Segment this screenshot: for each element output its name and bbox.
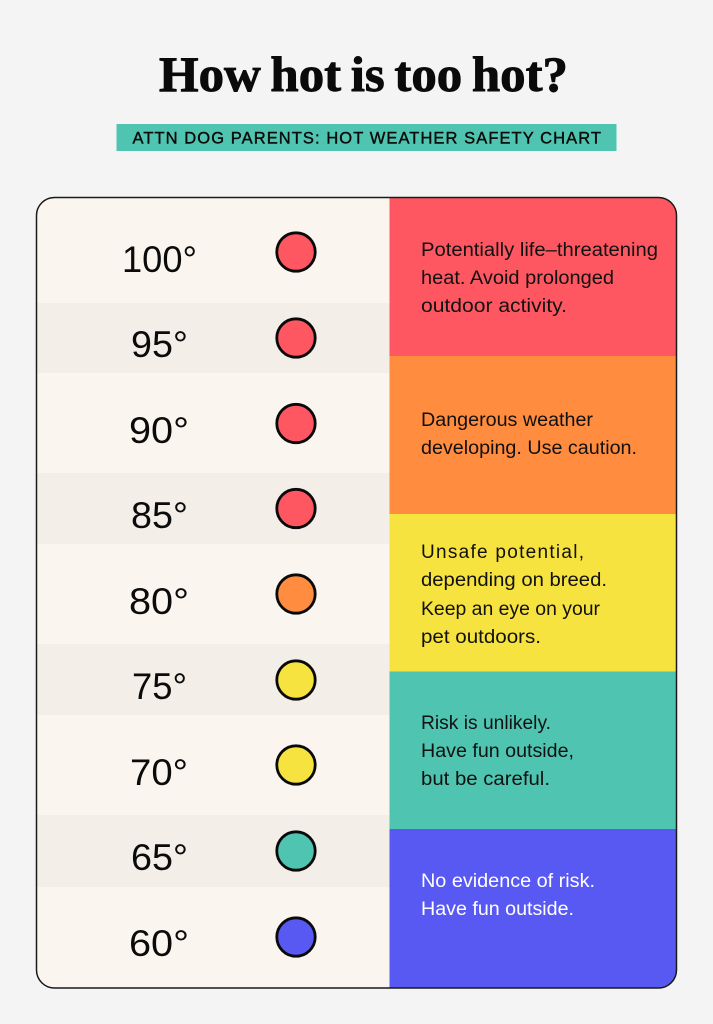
panel: safety chart bbox=[36, 197, 678, 989]
risk text: no evidence: No evidence of risk. bbox=[421, 871, 595, 892]
temperature row: 70: 70° bbox=[130, 751, 188, 793]
temperature row: 85 bbox=[131, 489, 315, 536]
temperature row: 100: 100° bbox=[122, 238, 197, 280]
temperature row: 65: 65° bbox=[131, 836, 188, 878]
risk text: unlikely: Risk is unlikely. bbox=[421, 713, 551, 734]
temperature row: 65 bbox=[131, 832, 315, 878]
risk text: dangerous: Dangerous weather bbox=[421, 410, 594, 431]
risk text: dangerous bbox=[421, 410, 637, 459]
temperature row: 80: 80° bbox=[129, 580, 189, 622]
temperature row: 95 bbox=[131, 319, 315, 365]
temperature row: 75: 75° bbox=[132, 665, 187, 707]
risk text: unlikely bbox=[421, 713, 574, 790]
risk text: dangerous: developing. Use caution. bbox=[421, 438, 637, 459]
risk text: unlikely: Have fun outside, bbox=[421, 741, 574, 762]
temperature row: 90 bbox=[129, 404, 315, 451]
subtitle banner: ATTN DOG PARENTS: HOT WEATHER SAFETY CHART bbox=[132, 130, 601, 148]
temperature row: 70 bbox=[130, 746, 315, 793]
title: How hot is too hot? bbox=[159, 46, 568, 102]
temperature row: 85: 85° bbox=[131, 494, 188, 536]
risk text: unsafe potential: depending on breed. bbox=[421, 570, 607, 591]
risk text: no evidence: Have fun outside. bbox=[421, 899, 574, 920]
subtitle banner bbox=[116, 124, 616, 151]
temperature row: 75 bbox=[132, 661, 315, 707]
temperature row: 90: 90° bbox=[129, 409, 189, 451]
temperature row: 60: 60° bbox=[129, 922, 189, 964]
risk text: life-threatening: outdoor activity. bbox=[421, 296, 567, 317]
risk text: life-threatening bbox=[421, 240, 658, 317]
risk text: unsafe potential: pet outdoors. bbox=[421, 627, 541, 648]
risk text: unsafe potential: Unsafe potential, bbox=[421, 542, 584, 563]
risk text: unsafe potential: Keep an eye on your bbox=[421, 599, 601, 620]
risk text: life-threatening: Potentially life–threatening bbox=[421, 240, 658, 261]
temperature row: 95: 95° bbox=[131, 323, 188, 365]
temperature row: 100 bbox=[122, 233, 315, 280]
risk text: life-threatening: heat. Avoid prolonged bbox=[421, 268, 614, 289]
risk text: unlikely: but be careful. bbox=[421, 769, 550, 790]
temperature row: 60 bbox=[129, 918, 315, 964]
temperature row: 80 bbox=[129, 575, 315, 622]
risk text: unsafe potential bbox=[421, 542, 607, 648]
risk text: no evidence bbox=[421, 871, 595, 920]
